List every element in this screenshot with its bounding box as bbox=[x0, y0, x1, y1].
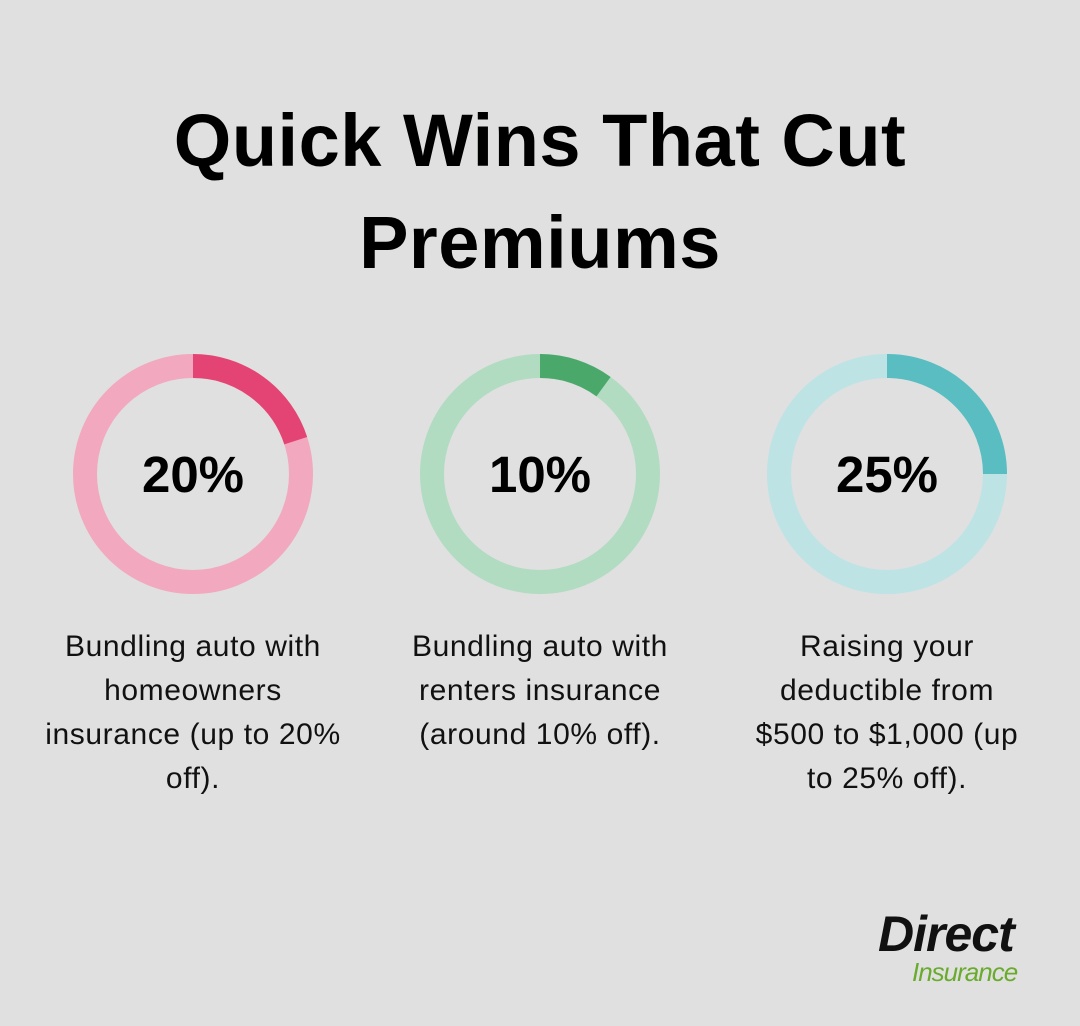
donut: 10% bbox=[420, 354, 660, 594]
title: Premiums bbox=[359, 201, 721, 284]
description 1: Bundling auto with homeowners insurance (up to 20% off). bbox=[45, 630, 341, 795]
title bbox=[174, 99, 906, 284]
logo: Insurance bbox=[912, 957, 1017, 987]
title: Quick Wins That Cut bbox=[174, 99, 906, 182]
description 2: Bundling auto with renters insurance (around 10% off). bbox=[412, 630, 668, 751]
donut: 20% bbox=[73, 354, 313, 594]
donut: 10%: 10% bbox=[489, 446, 591, 503]
description 3: Raising your deductible from $500 to $1,000 (up to 25% off). bbox=[756, 630, 1018, 795]
logo: Direct bbox=[878, 906, 1014, 962]
donut: 25%: 25% bbox=[836, 446, 938, 503]
donut: 25% bbox=[767, 354, 1007, 594]
donut: 20%: 20% bbox=[142, 446, 244, 503]
logo bbox=[878, 906, 1018, 987]
